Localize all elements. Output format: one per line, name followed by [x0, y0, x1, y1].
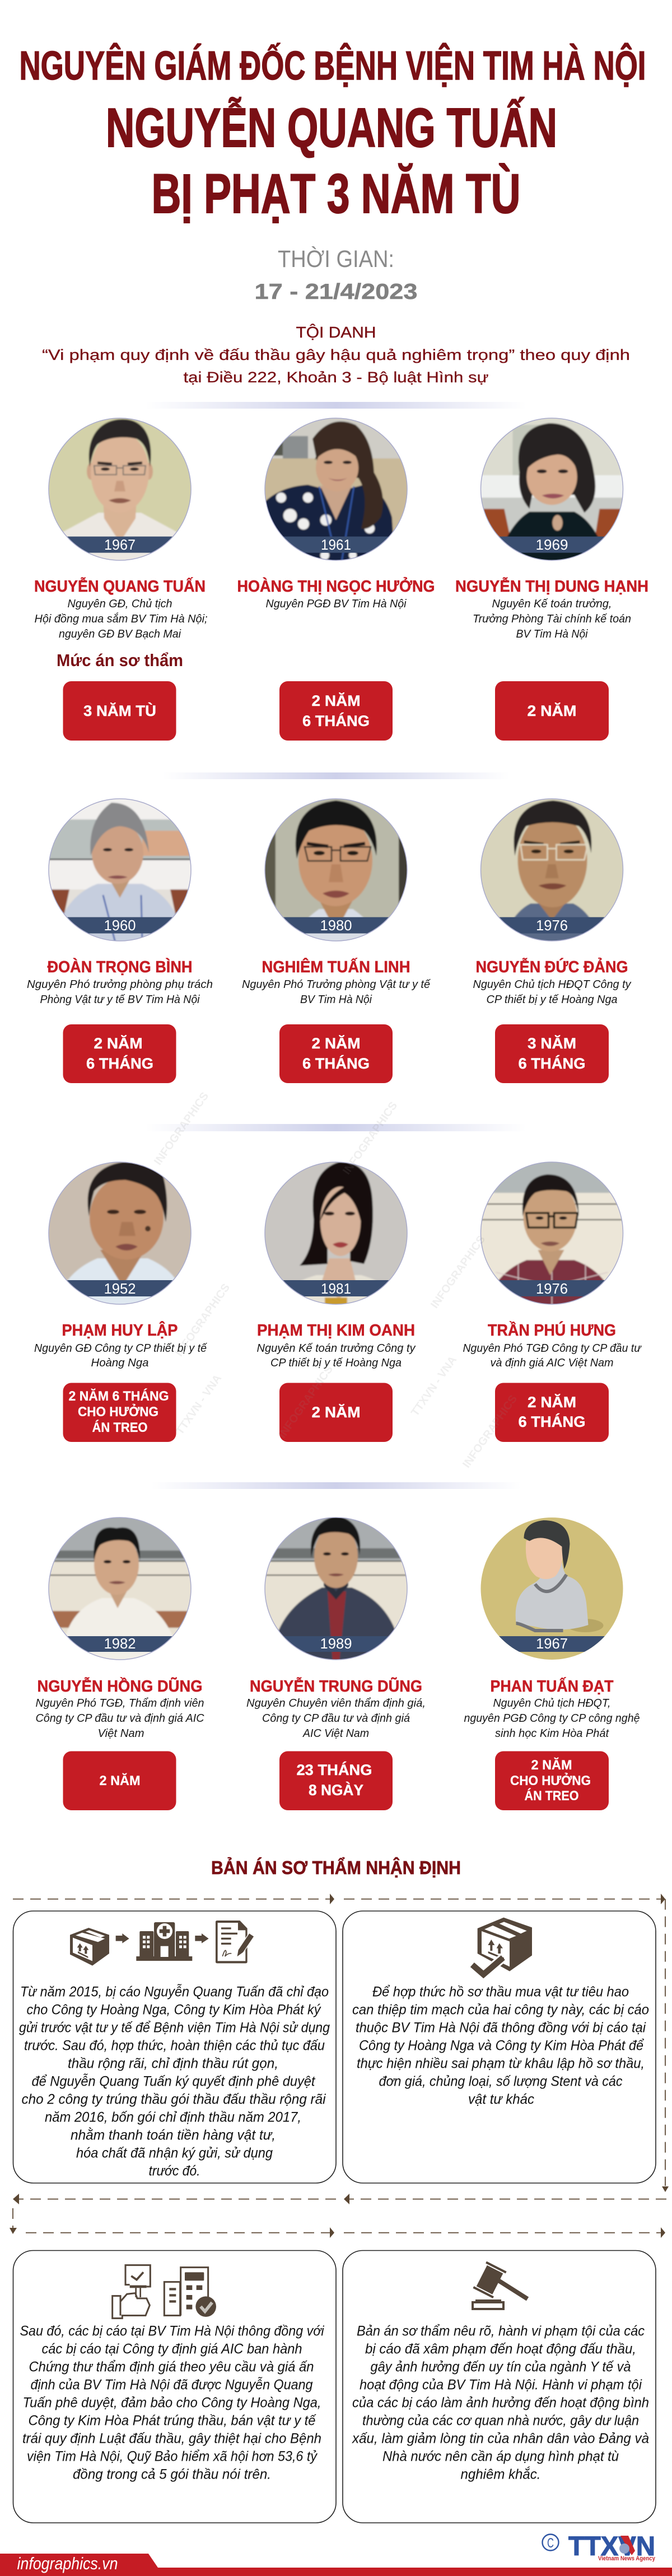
portrait	[479, 416, 625, 562]
text: Sau đó, các bị cáo tại BV Tim Hà Nội thông đồng với	[20, 2323, 325, 2339]
portrait: 1952	[104, 1280, 136, 1297]
name: NGUYỄN ĐỨC ĐẢNG	[476, 957, 628, 976]
portrait	[47, 1516, 193, 1661]
sentence: ÁN TREO	[92, 1420, 148, 1435]
text: Để hợp thức hồ sơ thầu mua vật tư tiêu hao	[372, 1984, 629, 1999]
text: Bản án sơ thẩm nêu rõ, hành vi phạm tội của các	[357, 2323, 645, 2339]
sentence	[63, 681, 176, 741]
portrait: 1961	[321, 536, 351, 553]
sentence	[63, 1751, 176, 1810]
portrait: 1989	[320, 1635, 352, 1652]
sentence	[495, 1024, 609, 1083]
sentence: 2 NĂM	[311, 1034, 361, 1052]
text	[20, 2323, 325, 2482]
role: Việt Nam	[97, 1727, 144, 1740]
portrait	[263, 1160, 409, 1306]
name: PHẠM THỊ KIM OANH	[257, 1322, 415, 1339]
sentence heading: Mức án sơ thẩm	[57, 650, 183, 670]
name: HOÀNG THỊ NGỌC HƯỞNG	[237, 577, 435, 596]
sentence: 2 NĂM	[311, 692, 361, 709]
watermark: INFOGRAPHICS	[173, 1281, 232, 1359]
watermark: TTXVN - VNA	[409, 1354, 459, 1418]
role: và định giá AIC Việt Nam	[491, 1357, 614, 1369]
text: đơn giá, chủng loại, số lượng Stent và các	[379, 2073, 623, 2089]
sentence: 2 NĂM	[94, 1034, 142, 1052]
role	[473, 978, 631, 1006]
role: nguyên PGĐ Công ty CP công nghệ	[464, 1712, 640, 1725]
role: Nguyên Kế toán trưởng Công ty	[256, 1342, 416, 1355]
text: nghiêm khắc.	[460, 2466, 541, 2482]
sentence: 6 THÁNG	[302, 1055, 370, 1072]
sentence: 23 THÁNG	[297, 1761, 372, 1778]
sentence: 6 THÁNG	[86, 1055, 153, 1072]
sentence: CHO HƯỞNG	[510, 1772, 591, 1788]
role: Trưởng Phòng Tài chính kế toán	[473, 613, 631, 625]
role: Nguyên GĐ, Chủ tịch	[67, 598, 172, 610]
text: thực hiện nhiều sai phạm từ khâu lập hồ sơ thầu,	[357, 2055, 645, 2071]
role: Hội đồng mua sắm BV Tim Hà Nội;	[35, 612, 207, 625]
sentence: 3 NĂM TÙ	[83, 702, 156, 719]
text: Công ty Kim Hòa Phát trúng thầu, bán vật tư y tế	[28, 2413, 316, 2428]
charge text: TỘI DANH	[296, 324, 376, 341]
name: NGUYỄN QUANG TUẤN	[34, 577, 206, 596]
sentence	[63, 1383, 176, 1442]
role: CP thiết bị y tế Hoàng Nga	[270, 1357, 402, 1369]
text: năm 2016, bốn gói chỉ định thầu năm 2017,	[45, 2109, 301, 2125]
portrait	[47, 797, 193, 943]
panel: Phan Tuấn Đạt	[464, 1516, 640, 1810]
portrait	[263, 1516, 409, 1661]
text: hoạt động của BV Tim Hà Nội. Hành vi phạm tội	[360, 2377, 642, 2392]
sentence: 2 NĂM	[528, 1393, 576, 1411]
sentence: 2 NĂM	[100, 1773, 140, 1788]
portrait: 1976	[536, 917, 568, 934]
sentence: 6 THÁNG	[519, 1055, 586, 1072]
role: Hoàng Nga	[91, 1357, 149, 1369]
text: xấu, làm giảm lòng tin của nhân dân vào Đảng và	[352, 2430, 649, 2446]
text: thuộc BV Tim Hà Nội đã thông đồng với bị cáo tại	[356, 2020, 646, 2035]
role	[464, 1697, 640, 1740]
panel: finding 1	[13, 1911, 336, 2183]
section heading: BẢN ÁN SƠ THẨM NHẬN ĐỊNH	[211, 1857, 461, 1878]
watermark: INFOGRAPHICS	[152, 1090, 211, 1168]
portrait: 1980	[320, 917, 352, 934]
role: Phòng Vật tư y tế BV Tim Hà Nội	[40, 994, 200, 1006]
role: Công ty CP đầu tư và định giá AIC	[36, 1712, 204, 1725]
portrait	[47, 1160, 193, 1306]
portrait	[479, 797, 625, 943]
icon: goods, hospital, document	[70, 1921, 254, 1966]
text: Công ty Hoàng Nga và Công ty Kim Hòa Phát để	[359, 2038, 644, 2053]
watermark	[152, 1090, 520, 1470]
sentence: 2 NĂM	[311, 1403, 361, 1421]
text: cho 2 công ty trúng thầu gói thầu đấu thầu rộng rãi	[21, 2091, 326, 2107]
text: trái quy định Luật đấu thầu, gây thiệt hại cho Bệnh	[22, 2430, 321, 2446]
logo: TTXVN: Vietnam News Agency	[598, 2555, 656, 2562]
footer band	[0, 2554, 672, 2576]
text: can thiệp tim mạch của hai công ty này, các bị cáo	[352, 2002, 649, 2017]
sentence	[495, 1383, 609, 1442]
panel: Nguyễn Quang Tuấn	[34, 416, 207, 741]
sentence: 8 NGÀY	[309, 1781, 363, 1798]
watermark: INFOGRAPHICS	[460, 1393, 520, 1470]
sentence: ÁN TREO	[524, 1788, 579, 1804]
role	[463, 1342, 642, 1369]
time label: THỜI GIAN:	[278, 246, 394, 273]
role: Nguyên Kế toán trưởng,	[492, 598, 612, 610]
name: NGUYỄN HỒNG DŨNG	[37, 1676, 203, 1696]
role	[34, 1342, 208, 1369]
text: hóa chất đã nhận ký gửi, sử dụng	[76, 2145, 273, 2161]
role	[27, 978, 213, 1006]
panel: Nguyễn Hồng Dũng	[36, 1516, 204, 1810]
portrait: 1981	[321, 1280, 351, 1297]
text: Từ năm 2015, bị cáo Nguyễn Quang Tuấn đã chỉ đạo	[20, 1984, 329, 1999]
role: Nguyên Chủ tịch HĐQT,	[493, 1697, 610, 1709]
name: TRẦN PHÚ HƯNG	[488, 1320, 616, 1339]
portrait	[263, 797, 410, 943]
text	[352, 1984, 649, 2107]
sentence	[279, 1383, 393, 1442]
text: nhằm thanh toán tiền hàng vật tư,	[71, 2127, 276, 2143]
panel: Nguyễn Đức Đảng	[473, 797, 631, 1083]
portrait	[479, 1516, 625, 1661]
panel: Phạm Huy Lập	[34, 1160, 208, 1442]
icon: gavel	[473, 2261, 528, 2309]
sentence: CHO HƯỞNG	[78, 1403, 158, 1420]
panel: Nguyễn Thị Dung Hạnh	[455, 416, 648, 741]
logo: TTXVN: TTXVN	[568, 2532, 655, 2561]
date: 17 - 21/4/2023	[254, 280, 418, 304]
role	[36, 1697, 204, 1740]
name: NGUYỄN THỊ DUNG HẠNH	[455, 577, 648, 596]
sentence: 3 NĂM	[528, 1034, 576, 1052]
sentence	[495, 681, 609, 741]
portrait	[263, 416, 409, 562]
title: BỊ PHẠT 3 NĂM TÙ	[151, 162, 521, 224]
footer band: infographics.vn	[17, 2554, 118, 2573]
panel: Hoàng Thị Ngọc Hưởng	[237, 416, 435, 741]
role: BV Tim Hà Nội	[516, 628, 588, 640]
text: đồng trong cả 5 gói thầu nói trên.	[73, 2466, 271, 2482]
text: trước. Sau đó, hợp thức, hoàn thiện các thủ tục đấu	[24, 2038, 325, 2053]
name: PHẠM HUY LẬP	[62, 1320, 178, 1339]
watermark: TTXVN - VNA	[174, 1373, 224, 1437]
portrait: 1967	[536, 1635, 568, 1652]
panel: finding 2	[343, 1911, 656, 2183]
portrait	[47, 416, 193, 562]
charge text: “Vi phạm quy định về đấu thầu gây hậu quả nghiêm trọng” theo quy định	[42, 346, 630, 363]
text: vật tư khác	[468, 2091, 534, 2107]
panel: Đoàn Trọng Bình	[27, 797, 213, 1083]
sentence	[279, 681, 393, 741]
text: Nhà nước nên cần áp dụng hình phạt tù	[382, 2448, 619, 2464]
sentence	[279, 1751, 393, 1810]
role: BV Tim Hà Nội	[300, 994, 372, 1006]
panel: Nghiêm Tuấn Linh	[242, 797, 431, 1083]
role	[473, 598, 631, 640]
text: trước đó.	[149, 2163, 200, 2179]
charge text: tại Điều 222, Khoản 3 - Bộ luật Hình sự	[184, 369, 488, 386]
text: gây ảnh hưởng đến uy tín của ngành Y tế và	[371, 2359, 631, 2374]
panel: Phạm Thị Kim Oanh	[256, 1160, 416, 1442]
text: thường của các cơ quan nhà nước, gây dư luận	[362, 2413, 639, 2428]
role: AIC Việt Nam	[302, 1727, 369, 1740]
sentence	[495, 1751, 609, 1810]
name: NGHIÊM TUẤN LINH	[262, 957, 410, 976]
role: nguyên GĐ BV Bạch Mai	[59, 628, 181, 640]
text: bị cáo đã xâm phạm đến hoạt động đấu thầu,	[365, 2341, 636, 2357]
charge text	[42, 324, 630, 386]
panel: finding 3	[13, 2250, 336, 2523]
text: của các bị cáo làm ảnh hưởng đến hoạt động bình	[352, 2395, 649, 2410]
name: PHAN TUẤN ĐẠT	[491, 1676, 614, 1696]
portrait: 1960	[104, 917, 136, 934]
watermark: INFOGRAPHICS	[428, 1233, 488, 1311]
sentence: 2 NĂM	[531, 1757, 572, 1773]
title	[19, 43, 646, 224]
text	[19, 1984, 330, 2179]
portrait: 1969	[535, 536, 568, 553]
text: gửi trước vật tư y tế để Bệnh viện Tim Hà Nội sử dụng	[19, 2020, 330, 2035]
role	[242, 978, 431, 1006]
role	[35, 598, 207, 640]
logo: TTXVN: C	[547, 2536, 554, 2551]
text: để Nguyễn Quang Tuấn ký quyết định phê duyệt	[31, 2073, 315, 2089]
text: cho Công ty Hoàng Nga, Công ty Kim Hòa Phát ký	[27, 2002, 321, 2017]
text: viện Tim Hà Nội, Quỹ Bảo hiểm xã hội hơn 53,6 tỷ	[27, 2448, 318, 2464]
panel: finding 4	[343, 2250, 656, 2523]
panel: Trần Phú Hưng	[463, 1160, 642, 1442]
portrait: 1982	[104, 1635, 136, 1652]
sentence: 6 THÁNG	[519, 1413, 586, 1430]
role: Nguyên Chuyên viên thẩm định giá,	[246, 1697, 426, 1709]
text: thầu rộng rãi, chỉ định thầu rút gọn,	[68, 2055, 278, 2071]
watermark: INFOGRAPHICS	[276, 1363, 335, 1441]
role: Nguyên GĐ Công ty CP thiết bị y tế	[34, 1342, 208, 1355]
sentence: 6 THÁNG	[302, 712, 370, 729]
text: Chứng thư thẩm định giá theo yêu cầu và giá ấn	[29, 2359, 314, 2374]
text: các bị cáo tại Công ty định giá AIC ban hành	[41, 2341, 302, 2357]
icon: hand with sign and building	[113, 2265, 216, 2319]
sentence	[63, 1024, 176, 1083]
role	[256, 1342, 416, 1369]
text: Tuấn phê duyệt, đảm bảo cho Công ty Hoàng Nga,	[22, 2395, 321, 2410]
role: Nguyên Phó TGĐ, Thẩm định viên	[36, 1697, 204, 1709]
sentence: 2 NĂM 6 THÁNG	[68, 1388, 169, 1404]
portrait	[479, 1160, 625, 1306]
sentence: 2 NĂM	[528, 702, 577, 719]
role: Nguyên PGĐ BV Tim Hà Nội	[265, 598, 407, 610]
portrait: 1976	[536, 1280, 568, 1297]
role: Nguyên Phó TGĐ Công ty CP đầu tư	[463, 1342, 642, 1355]
role	[246, 1697, 426, 1740]
icon: box with check	[472, 1918, 532, 1974]
role: CP thiết bị y tế Hoàng Nga	[486, 994, 617, 1006]
role: sinh học Kim Hòa Phát	[495, 1727, 609, 1740]
role: Nguyên Phó trưởng phòng phụ trách	[27, 978, 213, 991]
sentence	[279, 1024, 393, 1083]
watermark: INFOGRAPHICS	[340, 1099, 400, 1177]
role: Công ty CP đầu tư và định giá	[262, 1712, 410, 1725]
role: Nguyên Chủ tịch HĐQT Công ty	[473, 978, 631, 991]
text: định của BV Tim Hà Nội đã được Nguyễn Quang	[30, 2377, 313, 2392]
portrait: 1967	[104, 536, 136, 553]
name: NGUYỄN TRUNG DŨNG	[250, 1676, 422, 1696]
arrows	[10, 1894, 669, 2238]
text	[352, 2323, 649, 2482]
name: ĐOÀN TRỌNG BÌNH	[47, 957, 193, 976]
role: Nguyên Phó Trưởng phòng Vật tư y tế	[242, 978, 431, 991]
panel: Nguyễn Trung Dũng	[246, 1516, 426, 1810]
